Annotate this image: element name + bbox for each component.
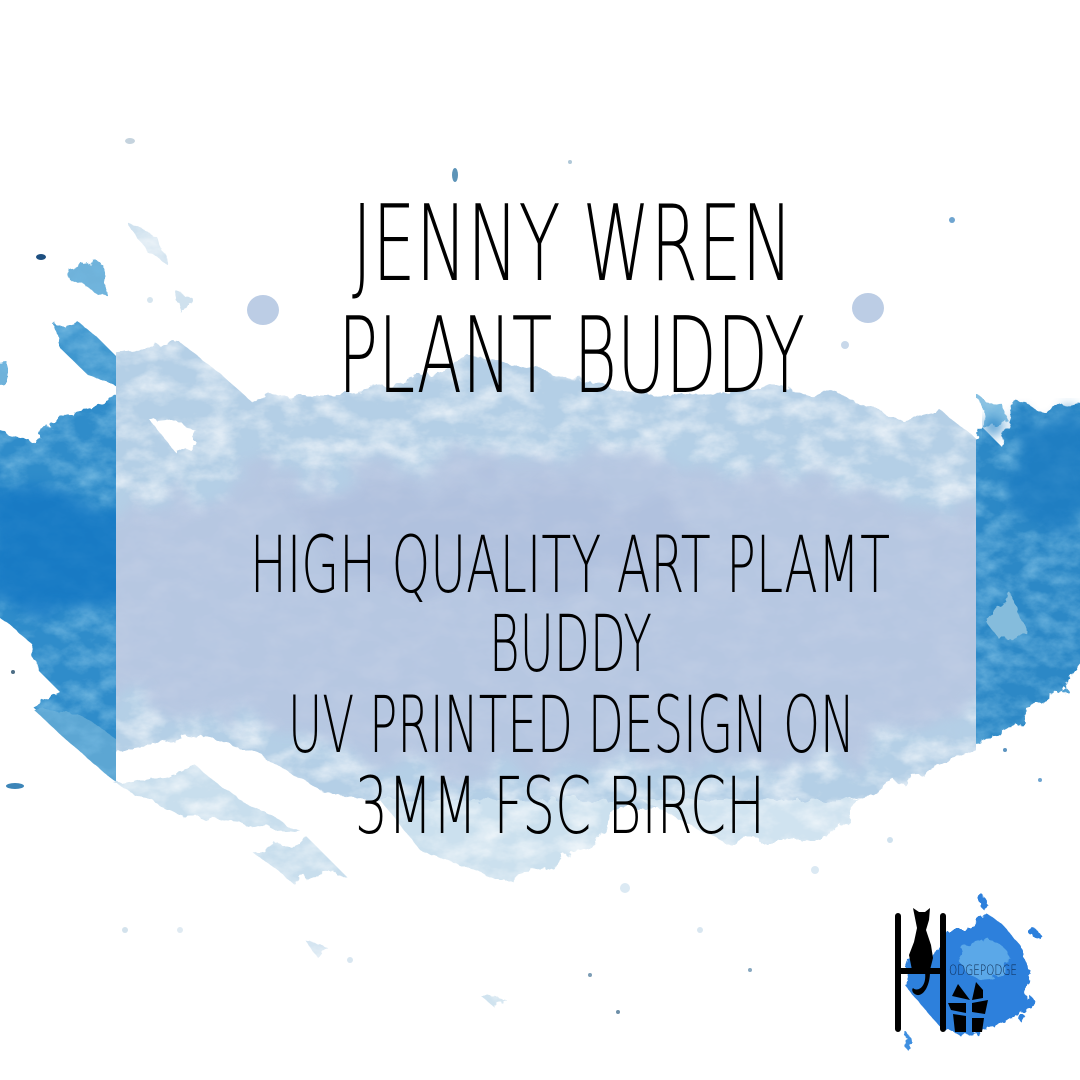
left watercolor splash <box>0 259 116 781</box>
description text: 3MM FSC BIRCH <box>355 762 765 852</box>
splatter drops <box>6 138 1042 1014</box>
icon: letter H <box>898 916 943 1029</box>
title <box>338 183 805 417</box>
title: JENNY WREN <box>352 183 793 305</box>
description text <box>250 521 890 852</box>
icon: cat <box>909 908 933 995</box>
title: PLANT BUDDY <box>338 295 805 417</box>
icon: gift <box>948 982 988 1032</box>
right watercolor splash <box>968 398 1080 748</box>
logo: Hodgepodge <box>898 896 1038 1050</box>
icon: blue splat <box>905 896 1038 1050</box>
description text: BUDDY <box>489 600 652 690</box>
pale splatter below and above the panel <box>116 225 860 1008</box>
logo wordmark: ODGEPODGE <box>949 963 1017 979</box>
pale watercolor behind the text panel <box>90 342 1000 810</box>
